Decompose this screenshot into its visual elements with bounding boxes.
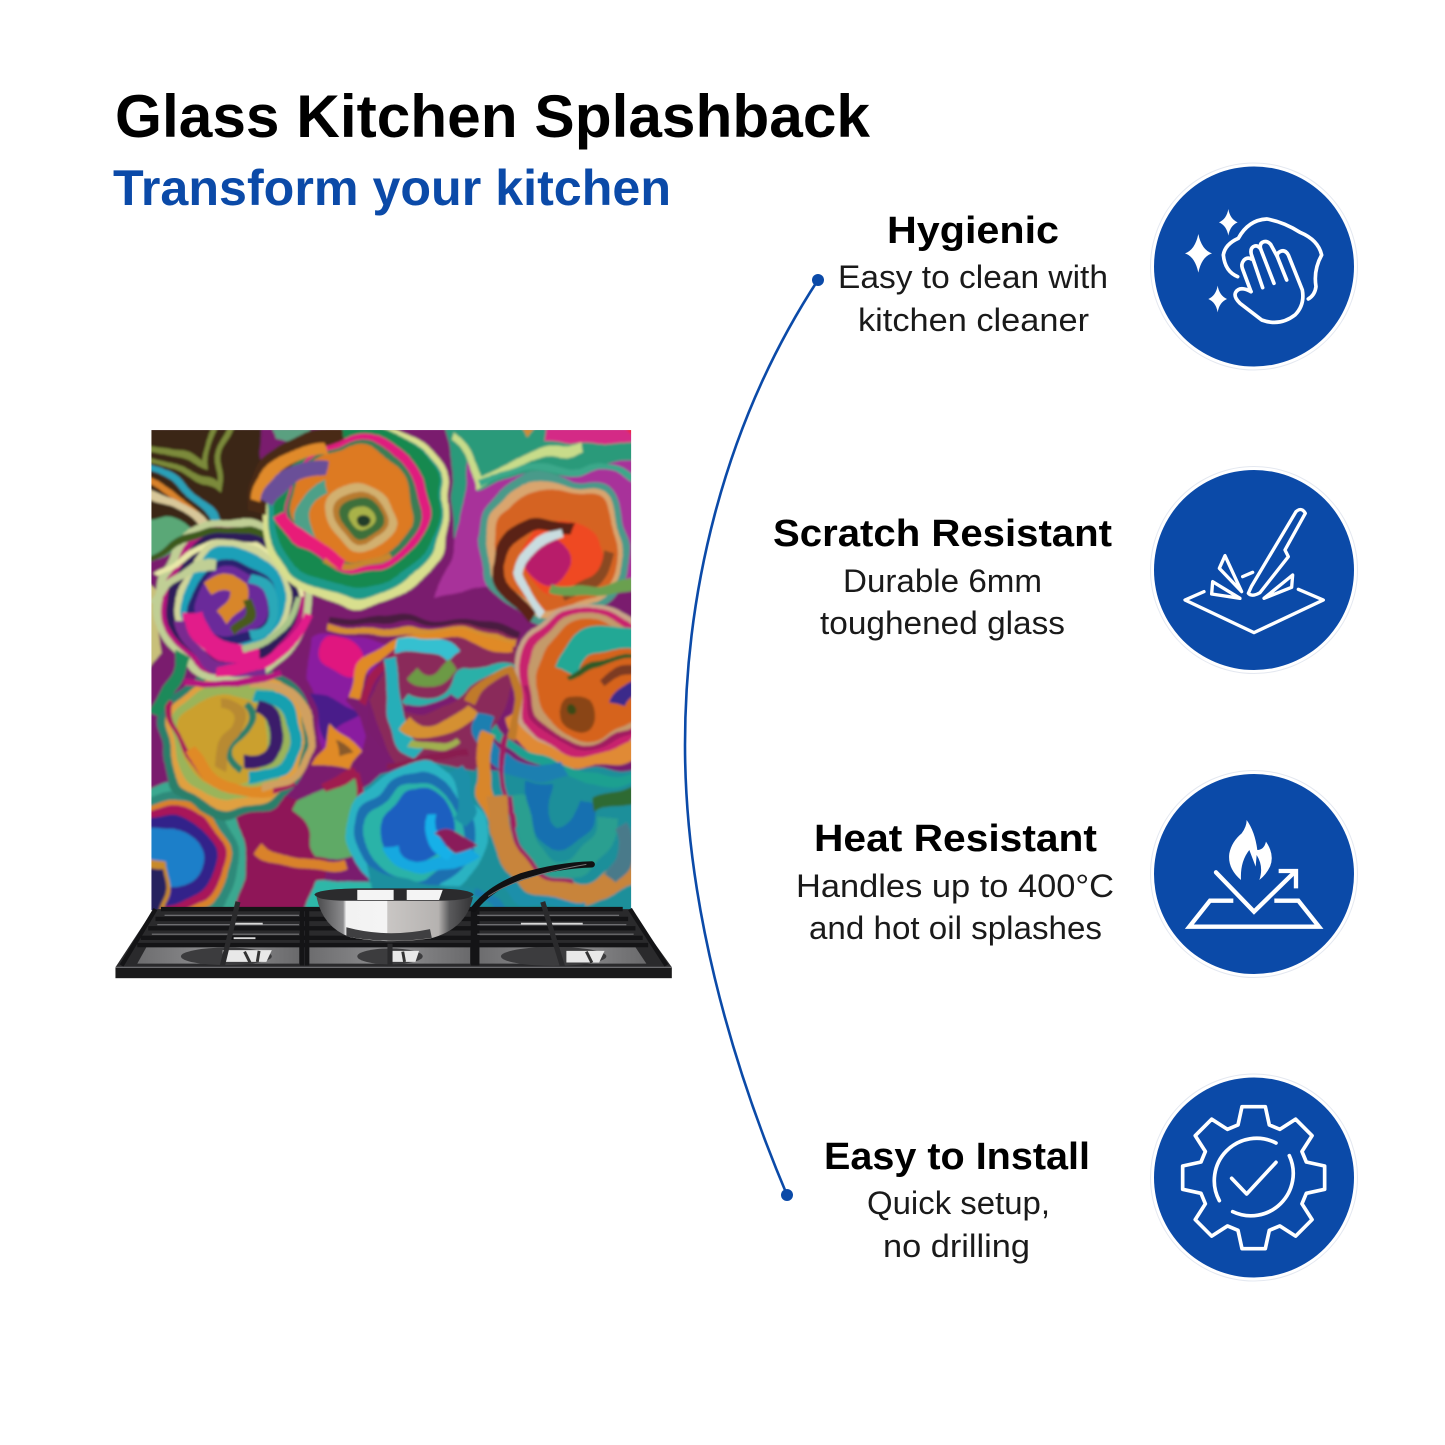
swirl: right [512, 602, 632, 754]
swirl: heart centre [365, 626, 521, 773]
corners and background [152, 430, 264, 528]
title: Glass Kitchen Splashback [115, 83, 871, 150]
steel cooktop panels [137, 947, 646, 964]
vertical grate bars [222, 902, 563, 967]
connector dot bottom [781, 1189, 793, 1201]
pan body [317, 897, 473, 941]
description [796, 868, 1114, 946]
gas hob [115, 902, 672, 978]
feature: heat resistant [796, 818, 1114, 946]
feature: scratch resistant [773, 513, 1112, 641]
icon: cleaning hand [1150, 163, 1358, 370]
swirl: top centre [263, 422, 448, 607]
description [820, 563, 1065, 641]
bottom layers [361, 761, 632, 910]
description [867, 1185, 1050, 1264]
description: and hot oil splashes [809, 910, 1102, 946]
description: toughened glass [820, 605, 1065, 641]
description: Durable 6mm [843, 563, 1042, 599]
heading: Scratch Resistant [773, 513, 1112, 555]
icon: knife scratching surface [1150, 466, 1358, 674]
heading: Hygienic [887, 210, 1059, 252]
front edge [115, 967, 672, 978]
icon: gear with check [1150, 1074, 1358, 1281]
swirl: large left [154, 518, 314, 678]
description: kitchen cleaner [858, 302, 1089, 338]
swirl: blue bottom [346, 765, 485, 904]
swirl glass panel [151, 430, 632, 910]
subtitle: Transform your kitchen [113, 160, 671, 216]
description: Handles up to 400°C [796, 868, 1114, 904]
connector dot top [812, 274, 824, 286]
swirl: top right [477, 471, 630, 624]
swirl: bottom left [151, 780, 248, 907]
swirl: orange-yellow left [155, 662, 312, 818]
swirl: bottom right [482, 733, 495, 827]
pan handle [474, 864, 592, 909]
heading: Heat Resistant [814, 818, 1097, 860]
burners [181, 924, 606, 966]
center magenta [306, 633, 386, 762]
feature: hygienic [838, 210, 1108, 338]
description: no drilling [883, 1228, 1030, 1264]
pan supports [122, 909, 666, 965]
feature: easy to install [824, 1136, 1090, 1264]
product image: splashback above gas hob [94, 398, 677, 978]
pan rim [314, 888, 474, 901]
description: Easy to clean with [838, 259, 1108, 295]
connector curve [685, 274, 824, 1201]
frying pan [314, 864, 592, 941]
description: Quick setup, [867, 1185, 1050, 1221]
icon: flame heat resistance [1150, 770, 1358, 978]
description [838, 259, 1108, 338]
heading: Easy to Install [824, 1136, 1090, 1178]
